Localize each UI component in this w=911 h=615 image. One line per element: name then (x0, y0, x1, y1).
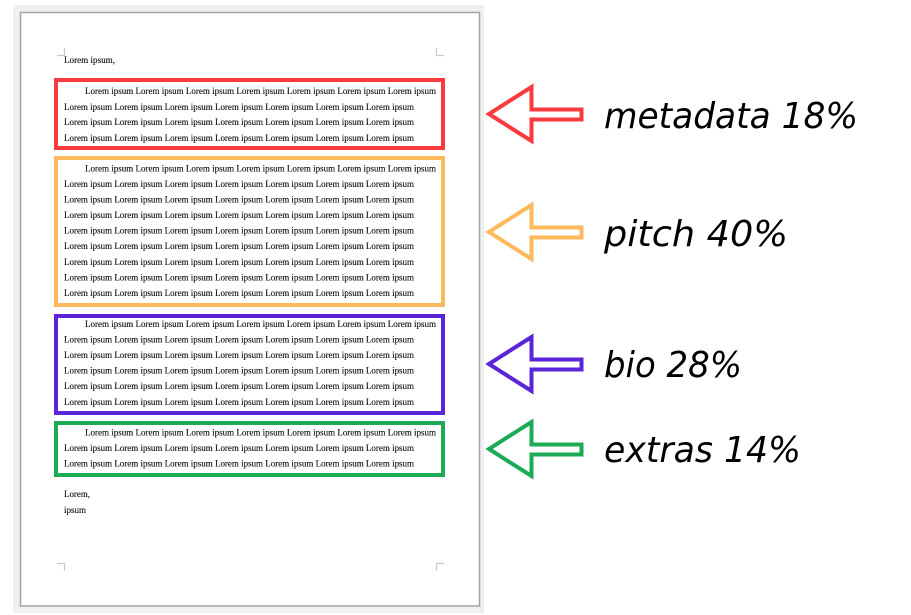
panel: bio section: Lorem ipsum Lorem ipsum Lorem ipsum Lorem ipsum Lorem ipsum Lorem ipsum Lorem ipsum (64, 381, 414, 391)
panel: bio section: Lorem ipsum Lorem ipsum Lorem ipsum Lorem ipsum Lorem ipsum Lorem ipsum Lorem ipsum (64, 334, 414, 344)
panel: bio section: Lorem ipsum Lorem ipsum Lorem ipsum Lorem ipsum Lorem ipsum Lorem ipsum Lorem ipsum (64, 350, 414, 360)
closing text: ipsum (64, 505, 86, 515)
panel: metadata section: Lorem ipsum Lorem ipsum Lorem ipsum Lorem ipsum Lorem ipsum Lorem ipsum Lorem ipsum (64, 133, 414, 143)
margin crop marks (57, 48, 444, 571)
panel: extras section (56, 423, 443, 475)
panel: extras section: Lorem ipsum Lorem ipsum Lorem ipsum Lorem ipsum Lorem ipsum Lorem ipsum Lorem ipsum (64, 458, 414, 468)
arrow: pitch (489, 205, 582, 259)
panel: extras section: Lorem ipsum Lorem ipsum Lorem ipsum Lorem ipsum Lorem ipsum Lorem ipsum Lorem ipsum (64, 443, 414, 453)
panel: pitch section: Lorem ipsum Lorem ipsum Lorem ipsum Lorem ipsum Lorem ipsum Lorem ipsum Lorem ipsum (64, 210, 414, 220)
panel: bio section: Lorem ipsum Lorem ipsum Lorem ipsum Lorem ipsum Lorem ipsum Lorem ipsum Lorem ipsum (85, 319, 436, 329)
document backdrop (13, 5, 484, 613)
closing text: Lorem, (64, 489, 90, 499)
panel: bio section: Lorem ipsum Lorem ipsum Lorem ipsum Lorem ipsum Lorem ipsum Lorem ipsum Lorem ipsum (64, 397, 414, 407)
panel: extras section: Lorem ipsum Lorem ipsum Lorem ipsum Lorem ipsum Lorem ipsum Lorem ipsum Lorem ipsum (85, 428, 436, 438)
panel: pitch section (56, 158, 443, 305)
panel: pitch section: Lorem ipsum Lorem ipsum Lorem ipsum Lorem ipsum Lorem ipsum Lorem ipsum Lorem ipsum (64, 194, 414, 204)
salutation text: Lorem ipsum, (64, 55, 115, 65)
panel: pitch section: Lorem ipsum Lorem ipsum Lorem ipsum Lorem ipsum Lorem ipsum Lorem ipsum Lorem ipsum (64, 272, 414, 282)
panel: bio section: Lorem ipsum Lorem ipsum Lorem ipsum Lorem ipsum Lorem ipsum Lorem ipsum Lorem ipsum (64, 366, 414, 376)
panel: pitch section: Lorem ipsum Lorem ipsum Lorem ipsum Lorem ipsum Lorem ipsum Lorem ipsum Lorem ipsum (85, 164, 436, 174)
panel: metadata section: Lorem ipsum Lorem ipsum Lorem ipsum Lorem ipsum Lorem ipsum Lorem ipsum Lorem ipsum (85, 86, 436, 96)
panel: pitch section: Lorem ipsum Lorem ipsum Lorem ipsum Lorem ipsum Lorem ipsum Lorem ipsum Lorem ipsum (64, 226, 414, 236)
panel: metadata section: Lorem ipsum Lorem ipsum Lorem ipsum Lorem ipsum Lorem ipsum Lorem ipsum Lorem ipsum (64, 102, 414, 112)
arrow: bio (489, 337, 582, 391)
arrow: metadata (489, 87, 582, 141)
arrow: extras (489, 422, 582, 476)
panel: pitch section: Lorem ipsum Lorem ipsum Lorem ipsum Lorem ipsum Lorem ipsum Lorem ipsum Lorem ipsum (64, 257, 414, 267)
document page (20, 12, 480, 606)
panel: bio section (56, 316, 443, 413)
panel: pitch section: Lorem ipsum Lorem ipsum Lorem ipsum Lorem ipsum Lorem ipsum Lorem ipsum Lorem ipsum (64, 288, 414, 298)
panel: pitch section: Lorem ipsum Lorem ipsum Lorem ipsum Lorem ipsum Lorem ipsum Lorem ipsum Lorem ipsum (64, 179, 414, 189)
panel: metadata section: Lorem ipsum Lorem ipsum Lorem ipsum Lorem ipsum Lorem ipsum Lorem ipsum Lorem ipsum (64, 117, 414, 127)
panel: metadata section (56, 80, 443, 148)
closing text (64, 489, 90, 515)
label: bio 28%: bio 28% (604, 345, 742, 386)
label: pitch 40%: pitch 40% (603, 214, 788, 255)
label: metadata 18%: metadata 18% (604, 96, 858, 137)
label: extras 14%: extras 14% (604, 430, 801, 471)
panel: pitch section: Lorem ipsum Lorem ipsum Lorem ipsum Lorem ipsum Lorem ipsum Lorem ipsum Lorem ipsum (64, 241, 414, 251)
